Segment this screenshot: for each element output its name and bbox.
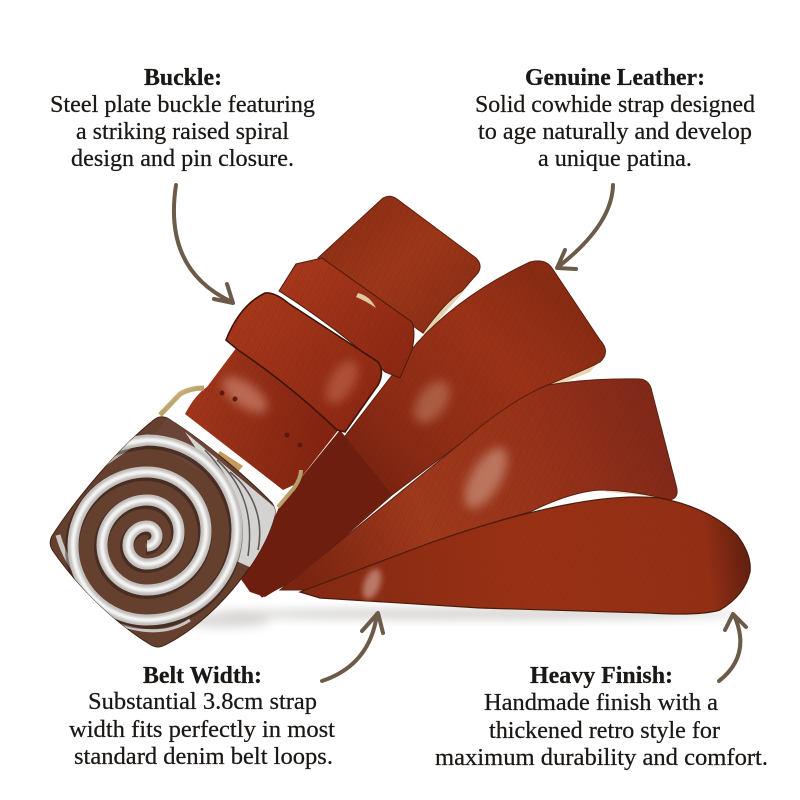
inner strap near buckle	[185, 347, 340, 490]
third strap	[280, 379, 677, 590]
third strap highlight	[456, 441, 516, 515]
keeper loop upper	[279, 258, 414, 378]
bottom strap highlight	[359, 566, 385, 602]
text: Belt Width description	[69, 689, 335, 770]
text: Heavy Finish description: maximum durability and comfort.	[435, 745, 768, 771]
text: Buckle description: a striking raised spiral	[76, 119, 289, 145]
text: Genuine Leather description: a unique patina.	[538, 146, 692, 172]
keeper loop lower	[226, 293, 382, 432]
arrow: Heavy Finish	[719, 614, 746, 681]
arrow: Genuine Leather	[557, 185, 613, 269]
text: Belt Width description: standard denim belt loops.	[74, 744, 333, 770]
text: Heavy Finish description: Handmade finish with a	[484, 690, 718, 716]
spiral silver band	[73, 440, 237, 620]
second strap	[240, 261, 606, 597]
text: Genuine Leather description: Solid cowhide strap designed	[475, 92, 755, 118]
lower dark strap beneath buckle	[238, 430, 392, 597]
text: Heavy Finish description: thickened retro style for	[489, 718, 720, 744]
text: Genuine Leather description: to age naturally and develop	[478, 119, 752, 145]
callout: Buckle	[50, 65, 315, 172]
infographic canvas	[50, 68, 766, 770]
spiral highlight	[73, 440, 237, 620]
outer silver edge	[185, 432, 278, 570]
buckle corner shading	[167, 418, 222, 458]
text: Genuine Leather description	[475, 92, 755, 172]
heading: Genuine Leather: Genuine Leather:	[525, 65, 705, 91]
callout: Belt Width	[69, 663, 335, 770]
arrow: Buckle	[174, 185, 233, 303]
text: Buckle description: Steel plate buckle featuring	[50, 92, 315, 118]
text: Buckle description	[50, 92, 315, 172]
floor shadow	[180, 608, 740, 628]
heading: Belt Width: Belt Width:	[143, 663, 262, 689]
bottom strap tip	[300, 497, 750, 614]
spiral buckle	[50, 415, 278, 647]
heading: Buckle: Buckle:	[144, 65, 222, 91]
text: Heavy Finish description	[435, 690, 768, 771]
text: Belt Width description: Substantial 3.8cm strap	[88, 689, 317, 715]
heading: Heavy Finish: Heavy Finish:	[530, 663, 673, 689]
spiral dark shadow	[72, 442, 236, 622]
buckle frame	[160, 388, 301, 507]
belt illustration	[50, 196, 750, 647]
second strap highlight	[407, 374, 457, 430]
callout: Genuine Leather	[475, 65, 755, 172]
top strap end	[318, 196, 480, 336]
arrow: Belt Width	[322, 613, 383, 681]
text: Buckle description: design and pin closure.	[71, 146, 294, 172]
callout: Heavy Finish	[435, 663, 768, 771]
text: Belt Width description: width fits perfectly in most	[69, 717, 335, 743]
